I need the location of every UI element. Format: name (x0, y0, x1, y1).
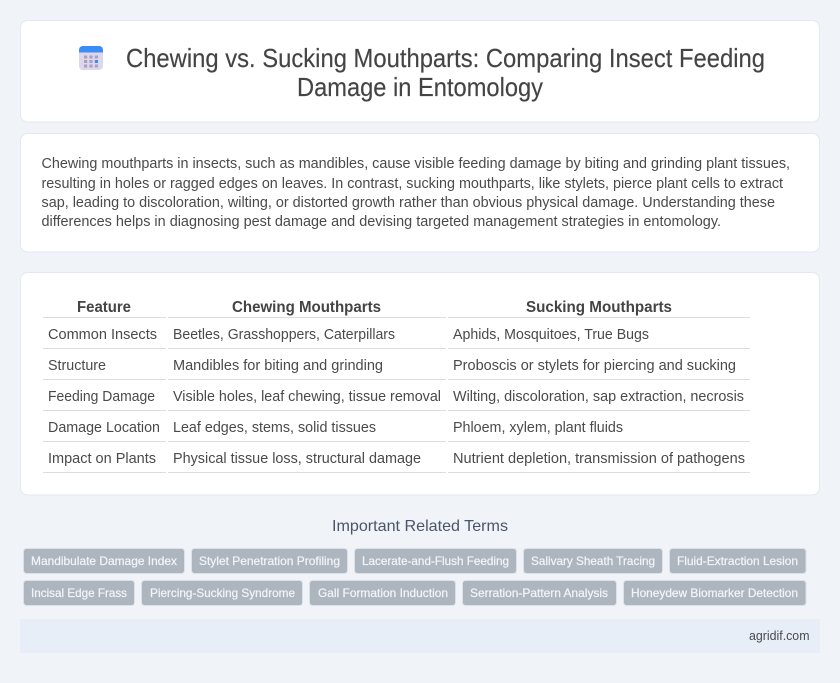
related term tags: Piercing-Sucking Syndrome (150, 586, 295, 600)
table header (77, 299, 672, 316)
row: common insects (48, 327, 649, 343)
table header: Feature (77, 299, 131, 316)
related term tags: Lacerate-and-Flush Feeding (362, 554, 509, 568)
row: impact on plants: Physical tissue loss, structural damage (173, 451, 421, 467)
row: damage location: Damage Location (48, 420, 160, 436)
panel: description (20, 134, 820, 252)
row: damage location: Phloem, xylem, plant fluids (453, 420, 623, 436)
row: common insects: Beetles, Grasshoppers, Caterpillars (173, 327, 395, 343)
header panel (20, 20, 820, 122)
footer (20, 619, 820, 653)
heading: important related terms: Important Related Terms (332, 518, 508, 535)
title (126, 45, 765, 102)
icon: calendar (79, 46, 103, 70)
description text: sap, leading to discoloration, wilting, or distorted growth rather than obvious physical damage. Understanding these (42, 195, 775, 211)
related term tags (24, 548, 806, 606)
row: structure: Proboscis or stylets for piercing and sucking (453, 358, 736, 374)
description text (42, 156, 790, 230)
related term tags: Gall Formation Induction (318, 586, 448, 600)
table header: Sucking Mouthparts (526, 299, 672, 316)
row: feeding damage (48, 389, 744, 405)
related term tags: Honeydew Biomarker Detection (631, 586, 798, 600)
row: damage location: Leaf edges, stems, solid tissues (173, 420, 376, 436)
row: common insects: Aphids, Mosquitoes, True Bugs (453, 327, 649, 343)
row: feeding damage: Wilting, discoloration, sap extraction, necrosis (453, 389, 744, 405)
title: Damage in Entomology (297, 74, 543, 102)
row: impact on plants: Nutrient depletion, transmission of pathogens (453, 451, 745, 467)
row: structure (48, 358, 736, 374)
related term tags: Fluid-Extraction Lesion (677, 554, 798, 568)
description text: Chewing mouthparts in insects, such as mandibles, cause visible feeding damage by biting and grinding plant tissues, (42, 156, 790, 172)
row: structure: Structure (48, 358, 106, 374)
related term tags: Stylet Penetration Profiling (199, 554, 340, 568)
related term tags: Incisal Edge Frass (31, 586, 127, 600)
related term tags: Serration-Pattern Analysis (470, 586, 608, 600)
row: feeding damage: Feeding Damage (48, 389, 155, 405)
description text: differences helps in diagnosing pest damage and devising targeted management strategies in entomology. (42, 214, 721, 230)
panel: comparison table (20, 272, 820, 495)
row: impact on plants: Impact on Plants (48, 451, 156, 467)
row: feeding damage: Visible holes, leaf chewing, tissue removal (173, 389, 441, 405)
title: Chewing vs. Sucking Mouthparts: Comparing Insect Feeding (126, 45, 765, 73)
description text: resulting in holes or ragged edges on leaves. In contrast, sucking mouthparts, like stylets, pierce plant cells to extract (42, 176, 783, 192)
row: impact on plants (48, 451, 745, 467)
row: common insects: Common Insects (48, 327, 157, 343)
row: damage location (48, 420, 623, 436)
related term tags: Salivary Sheath Tracing (531, 554, 655, 568)
related term tags: Mandibulate Damage Index (31, 554, 177, 568)
footer: agridif.com (749, 628, 810, 643)
row: structure: Mandibles for biting and grinding (173, 358, 383, 374)
table header: Chewing Mouthparts (232, 299, 381, 316)
